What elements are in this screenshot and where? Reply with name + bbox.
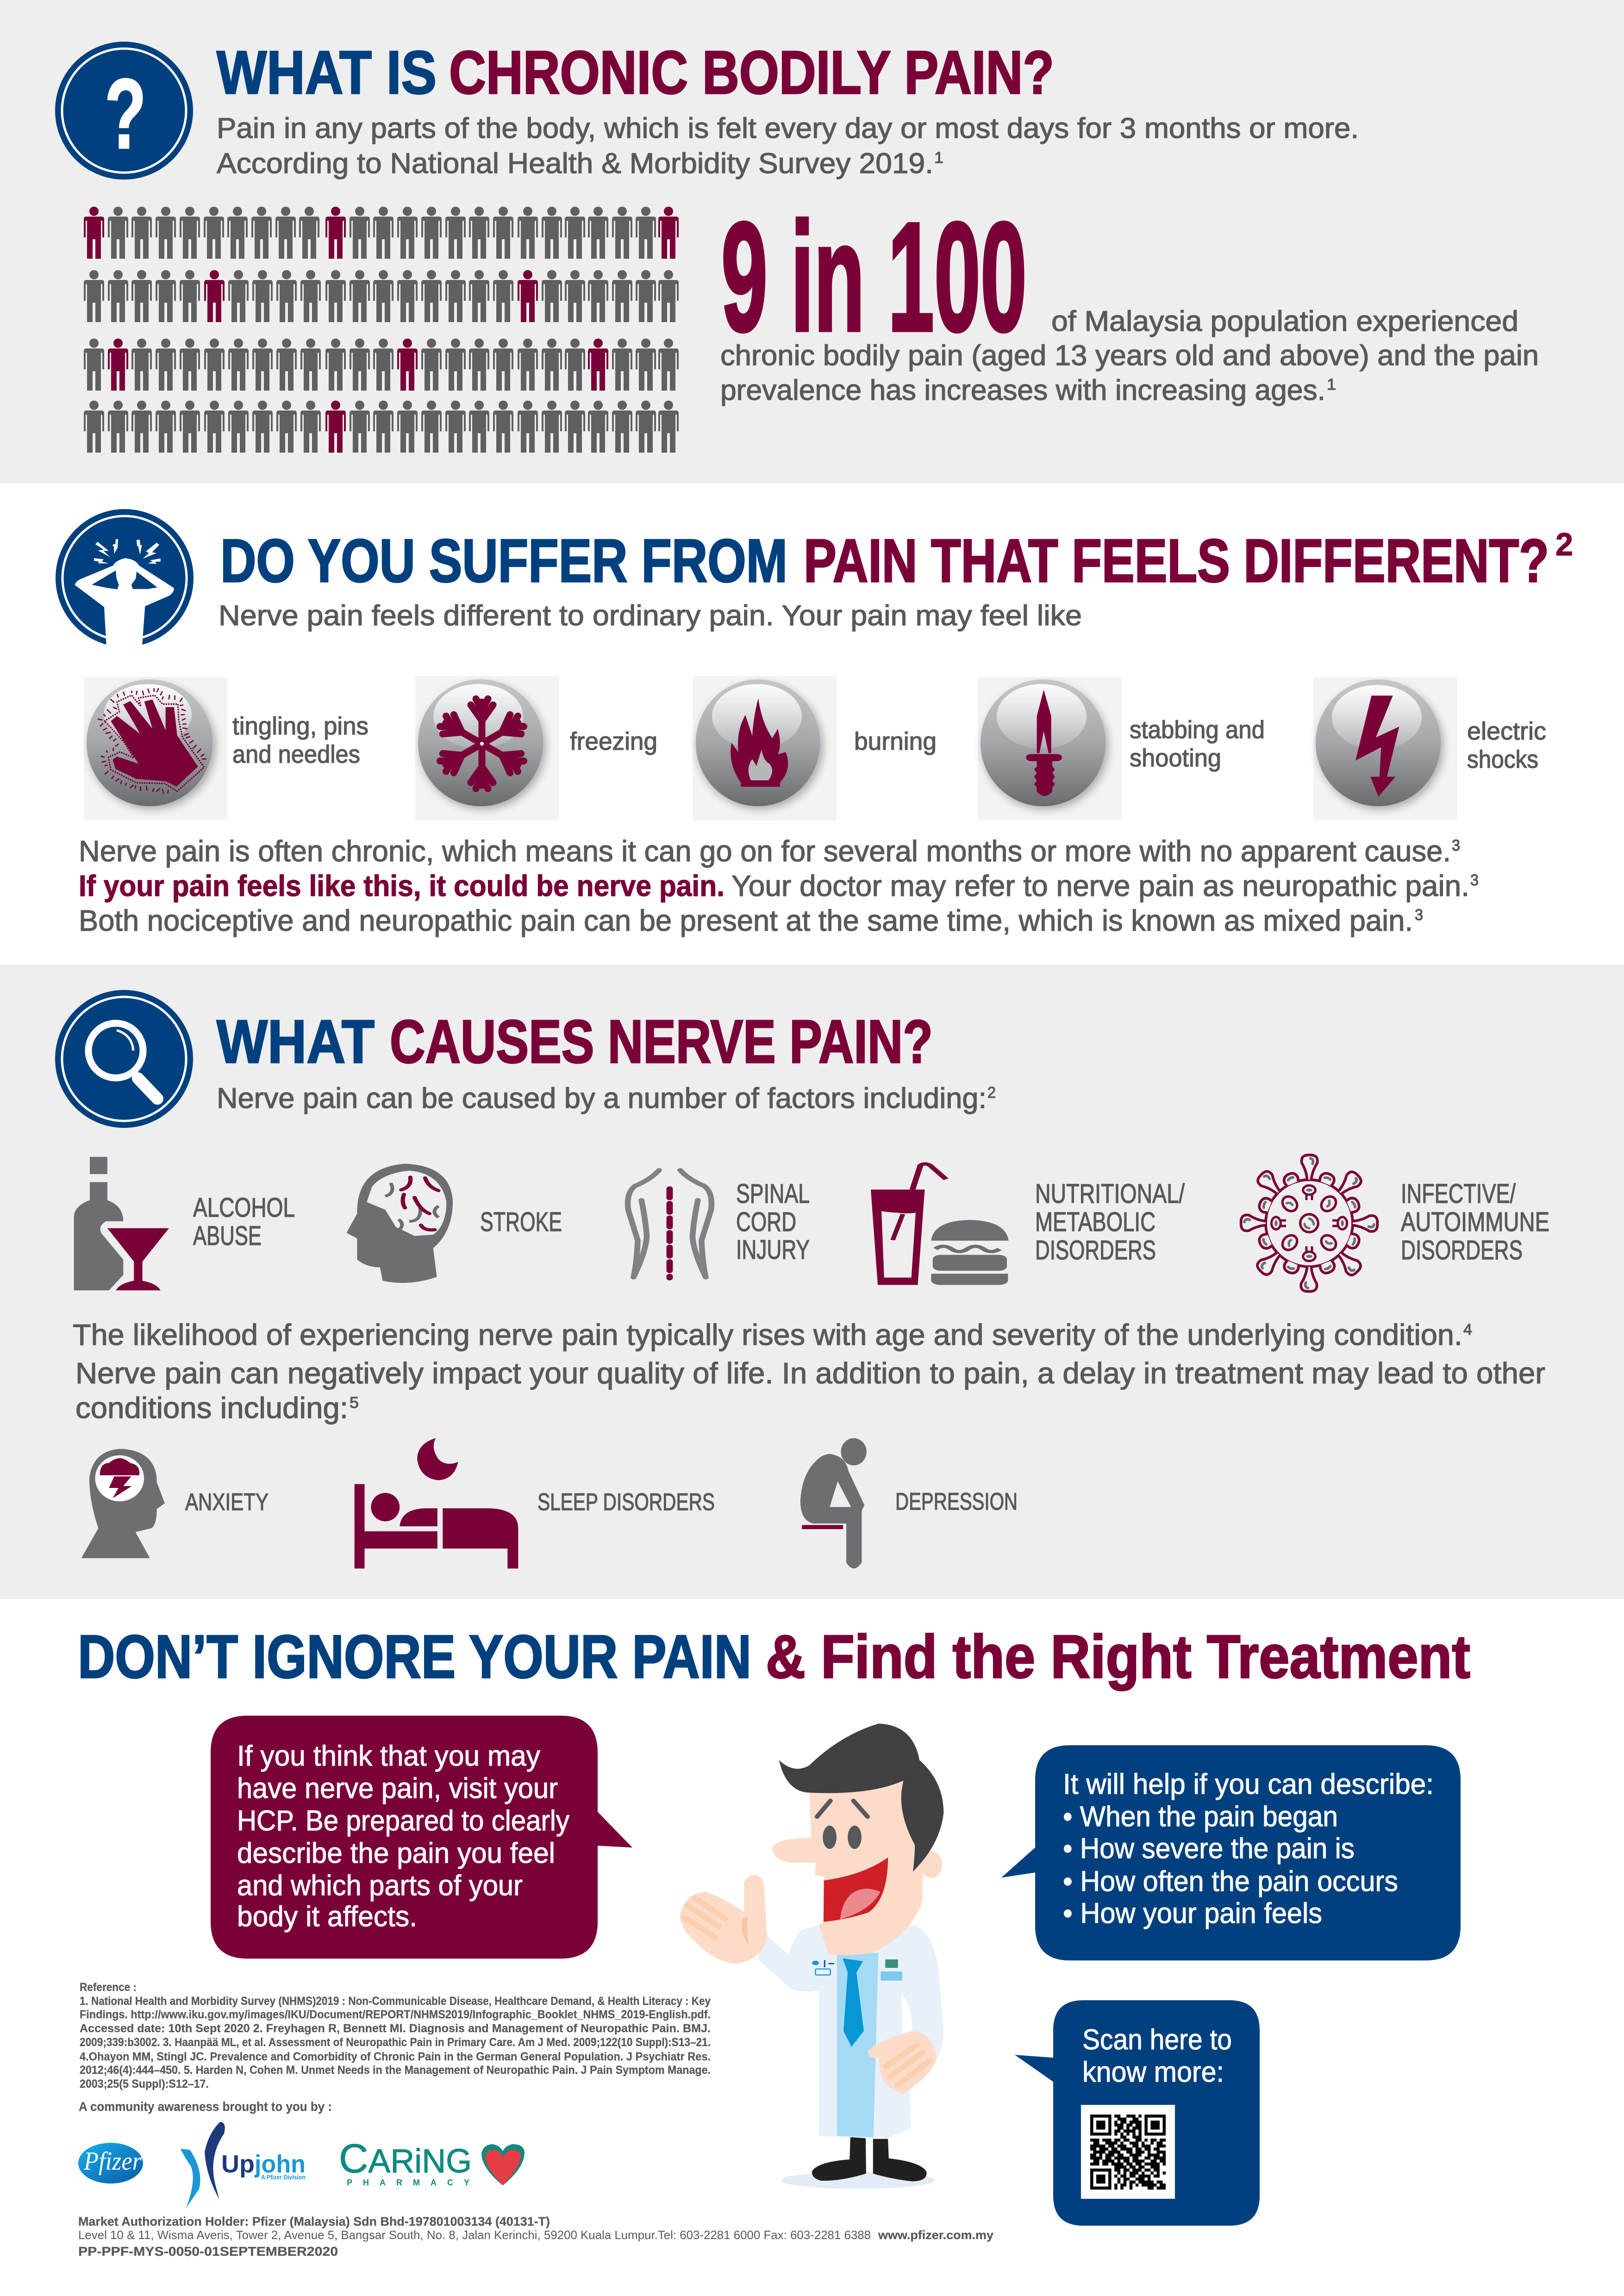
logo: Upjohn: Up bbox=[221, 2150, 255, 2178]
label: alcohol abuse: ALCOHOL bbox=[193, 1193, 295, 1223]
callout: visit your HCP: If you think that you may bbox=[237, 1740, 540, 1772]
logo: Pfizer bbox=[78, 2143, 143, 2184]
text: likelihood and quality of life: 4 bbox=[1463, 1321, 1472, 1338]
text: nerve pain explanation: Both nociceptive and neuropathic pain can be present at the same time, which is known as mixed pain. bbox=[79, 904, 1413, 937]
callout: what to describe: It will help if you can describe: bbox=[1063, 1768, 1434, 1800]
icon: drink and burger bbox=[871, 1164, 1008, 1285]
text: references bbox=[80, 1981, 711, 2091]
icon: spine and back bbox=[628, 1170, 712, 1278]
label: alcohol abuse: ABUSE bbox=[193, 1221, 262, 1251]
label: infective autoimmune disorders: INFECTIVE/ bbox=[1401, 1179, 1516, 1209]
panel: find the right treatment bbox=[78, 1623, 1470, 2259]
text: likelihood and quality of life bbox=[73, 1318, 1545, 1425]
heading: what is chronic bodily pain: WHAT IS bbox=[217, 38, 437, 106]
icon: tingling hand bbox=[84, 677, 228, 820]
text: references: 2012;46(4):444–450. 5. Harden N, Cohen M. Unmet Needs in the Management of Neuropathic Pain. J Pain Symptom Manage. bbox=[80, 2064, 711, 2077]
text: definition: 1 bbox=[934, 149, 943, 167]
label: spinal cord injury: SPINAL bbox=[736, 1179, 810, 1209]
text: market authorization bbox=[78, 2215, 994, 2259]
icon: bottle and glass bbox=[74, 1157, 169, 1290]
logo: Pfizer: Pfizer bbox=[83, 2147, 142, 2176]
label: stabbing and shooting bbox=[1130, 716, 1265, 772]
logo: Caring Pharmacy bbox=[339, 2135, 525, 2187]
label: spinal cord injury: CORD bbox=[736, 1207, 796, 1237]
icon: lightning bolt bbox=[1313, 677, 1457, 820]
text: stat description: 1 bbox=[1327, 376, 1336, 393]
heading: what causes nerve pain: CAUSES NERVE PAIN? bbox=[390, 1008, 933, 1076]
label: nutritional metabolic disorders: NUTRITIONAL/ bbox=[1035, 1179, 1185, 1209]
text: references: 4.Ohayon MM, Stingl JC. Prevalence and Comorbidity of Chronic Pain in the German General Population. J Psychiatr Res. bbox=[80, 2050, 711, 2063]
text: definition bbox=[217, 112, 1359, 180]
label: spinal cord injury bbox=[736, 1179, 810, 1265]
callout: what to describe: • How severe the pain is bbox=[1063, 1833, 1355, 1865]
callout: scan to know more bbox=[1015, 2000, 1260, 2226]
text: nerve pain explanation: Nerve pain is often chronic, which means it can go on for several months or more with no apparent cause. bbox=[79, 834, 1451, 868]
big stat: 9 in 100: 9 in 100 bbox=[721, 190, 1027, 363]
text: stat description: chronic bodily pain (aged 13 years old and above) and the pain bbox=[720, 340, 1539, 372]
label: nutritional metabolic disorders bbox=[1035, 1179, 1185, 1265]
text: causes intro: Nerve pain can be caused by a number of factors including: bbox=[217, 1083, 987, 1114]
icon: snowflake bbox=[415, 676, 559, 821]
icon: bed and moon bbox=[355, 1438, 518, 1568]
label: tingling, pins and needles: and needles bbox=[232, 740, 360, 768]
callout: scan to know more: know more: bbox=[1082, 2056, 1224, 2088]
text: stat description: of Malaysia population experienced bbox=[1051, 305, 1518, 337]
label: anxiety: ANXIETY bbox=[185, 1489, 269, 1516]
heading: don't ignore your pain and find the right treatment: & Find the Right Treatment bbox=[766, 1623, 1470, 1691]
text: likelihood and quality of life: The likelihood of experiencing nerve pain typically rises with age and severity of the underlying condition. bbox=[73, 1318, 1462, 1351]
illustration: cartoon doctor bbox=[680, 1724, 943, 2189]
heading: do you suffer from pain that feels different: DO YOU SUFFER FROM bbox=[220, 527, 787, 595]
text: references: Findings. http://www.iku.gov.my/images/IKU/Document/REPORT/NHMS2019/Infographic_Booklet_NHMS_2019-English.pdf. bbox=[80, 2008, 711, 2021]
label: nutritional metabolic disorders: DISORDERS bbox=[1035, 1235, 1156, 1265]
text: likelihood and quality of life: Nerve pain can negatively impact your quality of life. In addition to pain, a delay in treatment may lead to other bbox=[75, 1356, 1545, 1390]
text: references: Reference : bbox=[80, 1981, 137, 1994]
heading: don't ignore your pain and find the right treatment bbox=[78, 1623, 1470, 1691]
icon: dagger bbox=[978, 677, 1122, 820]
text: nerve pain explanation: 3 bbox=[1452, 837, 1460, 854]
chart: pictogram of 100 people with 9 highlighted bbox=[84, 206, 679, 453]
label: depression: DEPRESSION bbox=[895, 1488, 1018, 1515]
icon: person holding head badge bbox=[56, 509, 194, 648]
label: stroke: STROKE bbox=[480, 1207, 562, 1237]
logo: Caring Pharmacy: CARiNG bbox=[339, 2135, 472, 2181]
icon: anxiety head bbox=[81, 1449, 165, 1558]
label: sleep disorders: SLEEP DISORDERS bbox=[537, 1489, 715, 1516]
text: references: Accessed date: 10th Sept 2020 2. Freyhagen R, Bennett MI. Diagnosis and Management of Neuropathic Pain. BMJ. bbox=[80, 2022, 711, 2035]
label: freezing: freezing bbox=[570, 728, 657, 755]
text: causes intro: 2 bbox=[987, 1084, 996, 1101]
logo: Caring Pharmacy: PHARMACY bbox=[347, 2178, 469, 2187]
text: community awareness: A community awareness brought to you by : bbox=[79, 2099, 332, 2114]
text: market authorization: Market Authorization Holder: Pfizer (Malaysia) Sdn Bhd-197801003134 (40131-T) bbox=[78, 2215, 550, 2228]
heading: do you suffer from pain that feels different: 2 bbox=[1555, 526, 1573, 562]
panel: what causes nerve pain bbox=[0, 964, 1624, 1599]
text: definition: According to National Health & Morbidity Survey 2019. bbox=[217, 148, 933, 180]
label: tingling, pins and needles: tingling, pins bbox=[232, 712, 369, 740]
text: stat description bbox=[720, 305, 1539, 406]
label: stabbing and shooting: stabbing and bbox=[1130, 716, 1265, 744]
logo: Upjohn: A Pfizer Division bbox=[261, 2173, 306, 2181]
icon: question mark badge: ? bbox=[105, 58, 146, 169]
text: market authorization: www.pfizer.com.my bbox=[878, 2228, 994, 2242]
label: infective autoimmune disorders: AUTOIMMUNE bbox=[1401, 1207, 1549, 1237]
label: spinal cord injury: INJURY bbox=[736, 1235, 810, 1265]
label: burning: burning bbox=[854, 728, 937, 755]
text: likelihood and quality of life: conditions including: bbox=[75, 1391, 348, 1425]
icon: virus bbox=[1241, 1155, 1377, 1291]
text: nerve pain explanation: 3 bbox=[1415, 906, 1423, 924]
text: nerve pain intro: Nerve pain feels different to ordinary pain. Your pain may feel like bbox=[219, 600, 1082, 632]
icon: head with brain bbox=[346, 1164, 453, 1283]
logo: Upjohn bbox=[181, 2122, 306, 2208]
label: nutritional metabolic disorders: METABOLIC bbox=[1035, 1207, 1156, 1237]
logo: Upjohn: john bbox=[254, 2150, 306, 2178]
callout: visit your HCP: have nerve pain, visit your bbox=[237, 1773, 558, 1804]
label: alcohol abuse bbox=[193, 1193, 295, 1251]
callout: visit your HCP: HCP. Be prepared to clearly bbox=[237, 1805, 569, 1837]
heading: what is chronic bodily pain bbox=[217, 38, 1054, 106]
callout: visit your HCP bbox=[211, 1716, 632, 1959]
text: market authorization: PP-PPF-MYS-0050-01SEPTEMBER2020 bbox=[78, 2244, 338, 2259]
text: definition: Pain in any parts of the body, which is felt every day or most days for 3 months or more. bbox=[217, 112, 1359, 144]
label: electric shocks bbox=[1467, 717, 1546, 773]
text: references: 2009;339:b3002. 3. Haanpää ML, et al. Assessment of Neuropathic Pain in Primary Care. Am J Med. 2009;122(10 Suppl):S13–21. bbox=[80, 2036, 711, 2049]
text: nerve pain explanation: 3 bbox=[1470, 871, 1479, 889]
label: electric shocks: shocks bbox=[1467, 746, 1538, 773]
heading: what causes nerve pain bbox=[217, 1008, 933, 1076]
callout: visit your HCP: and which parts of your bbox=[237, 1870, 523, 1902]
label: tingling, pins and needles bbox=[232, 712, 369, 768]
icon: question mark badge bbox=[55, 42, 193, 180]
text: market authorization: Level 10 & 11, Wisma Averis, Tower 2, Avenue 5, Bangsar South, No. 8, Jalan Kerinchi, 59200 Kuala Lumpur.Tel: 603-2281 6000 Fax: 603-2281 6388 bbox=[78, 2228, 871, 2242]
label: electric shocks: electric bbox=[1467, 717, 1546, 745]
heading: do you suffer from pain that feels different bbox=[220, 526, 1573, 595]
callout: visit your HCP: describe the pain you feel bbox=[237, 1837, 555, 1869]
label: stabbing and shooting: shooting bbox=[1130, 744, 1221, 772]
icon: depressed person bbox=[800, 1438, 867, 1568]
panel: do you suffer from pain that feels different bbox=[56, 509, 1573, 937]
label: infective autoimmune disorders: DISORDERS bbox=[1401, 1235, 1523, 1265]
icon: flame bbox=[693, 676, 837, 821]
callout: what to describe: • How often the pain occurs bbox=[1063, 1866, 1398, 1898]
text: nerve pain explanation bbox=[79, 834, 1479, 937]
callout: what to describe: • How your pain feels bbox=[1063, 1898, 1322, 1929]
panel: what is chronic bodily pain bbox=[0, 0, 1624, 484]
icon: QR code bbox=[1081, 2105, 1175, 2199]
callout: what to describe bbox=[1001, 1745, 1461, 1960]
text: nerve pain explanation: Your doctor may refer to nerve pain as neuropathic pain. bbox=[731, 869, 1469, 902]
label: infective autoimmune disorders bbox=[1401, 1179, 1549, 1265]
callout: scan to know more: Scan here to bbox=[1082, 2024, 1232, 2056]
text: stat description: prevalence has increases with increasing ages. bbox=[720, 374, 1325, 406]
heading: don't ignore your pain and find the right treatment: DON’T IGNORE YOUR PAIN bbox=[78, 1623, 751, 1691]
text: references: 2003;25(5 Suppl):S12–17. bbox=[80, 2078, 209, 2091]
heading: what causes nerve pain: WHAT bbox=[217, 1008, 375, 1076]
heading: what is chronic bodily pain: CHRONIC BODILY PAIN? bbox=[449, 38, 1054, 106]
callout: visit your HCP: body it affects. bbox=[237, 1901, 417, 1933]
callout: what to describe: • When the pain began bbox=[1063, 1801, 1338, 1833]
text: references: 1. National Health and Morbidity Survey (NHMS)2019 : Non-Communicable Disease, Healthcare Demand, & Health Literacy : Key bbox=[80, 1995, 711, 2008]
text: likelihood and quality of life: 5 bbox=[350, 1394, 359, 1412]
text: nerve pain explanation: If your pain feels like this, it could be nerve pain. bbox=[79, 869, 725, 902]
icon: magnifying glass badge bbox=[55, 990, 193, 1128]
